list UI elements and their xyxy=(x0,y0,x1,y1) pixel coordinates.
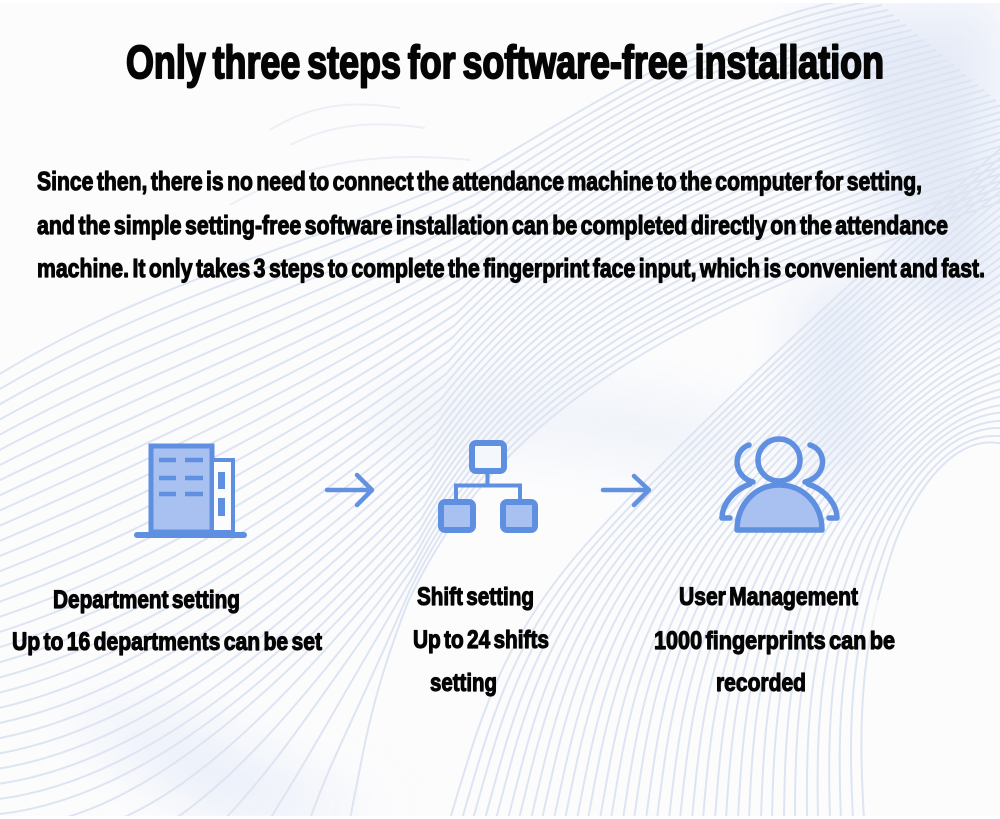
caption: shift setting: Shift setting xyxy=(417,583,534,611)
caption: user management xyxy=(654,583,895,697)
caption: department setting: Up to 16 departments can be set xyxy=(12,628,323,656)
caption: department setting: Department setting xyxy=(53,586,240,614)
caption: shift setting: Up to 24 shifts xyxy=(413,626,549,654)
caption: shift setting: setting xyxy=(430,669,497,697)
icon: users xyxy=(722,439,837,530)
caption: user management: 1000 fingerprints can be xyxy=(654,627,895,655)
caption: user management: User Management xyxy=(679,583,859,611)
caption: department setting xyxy=(12,586,323,656)
icon: organisation network xyxy=(441,443,535,530)
caption: shift setting xyxy=(413,583,549,697)
icon: building xyxy=(137,446,244,535)
arrow: step two to step three xyxy=(603,476,649,505)
arrow: step one to step two xyxy=(327,475,372,505)
intro paragraph xyxy=(37,166,985,283)
caption: user management: recorded xyxy=(716,669,806,697)
